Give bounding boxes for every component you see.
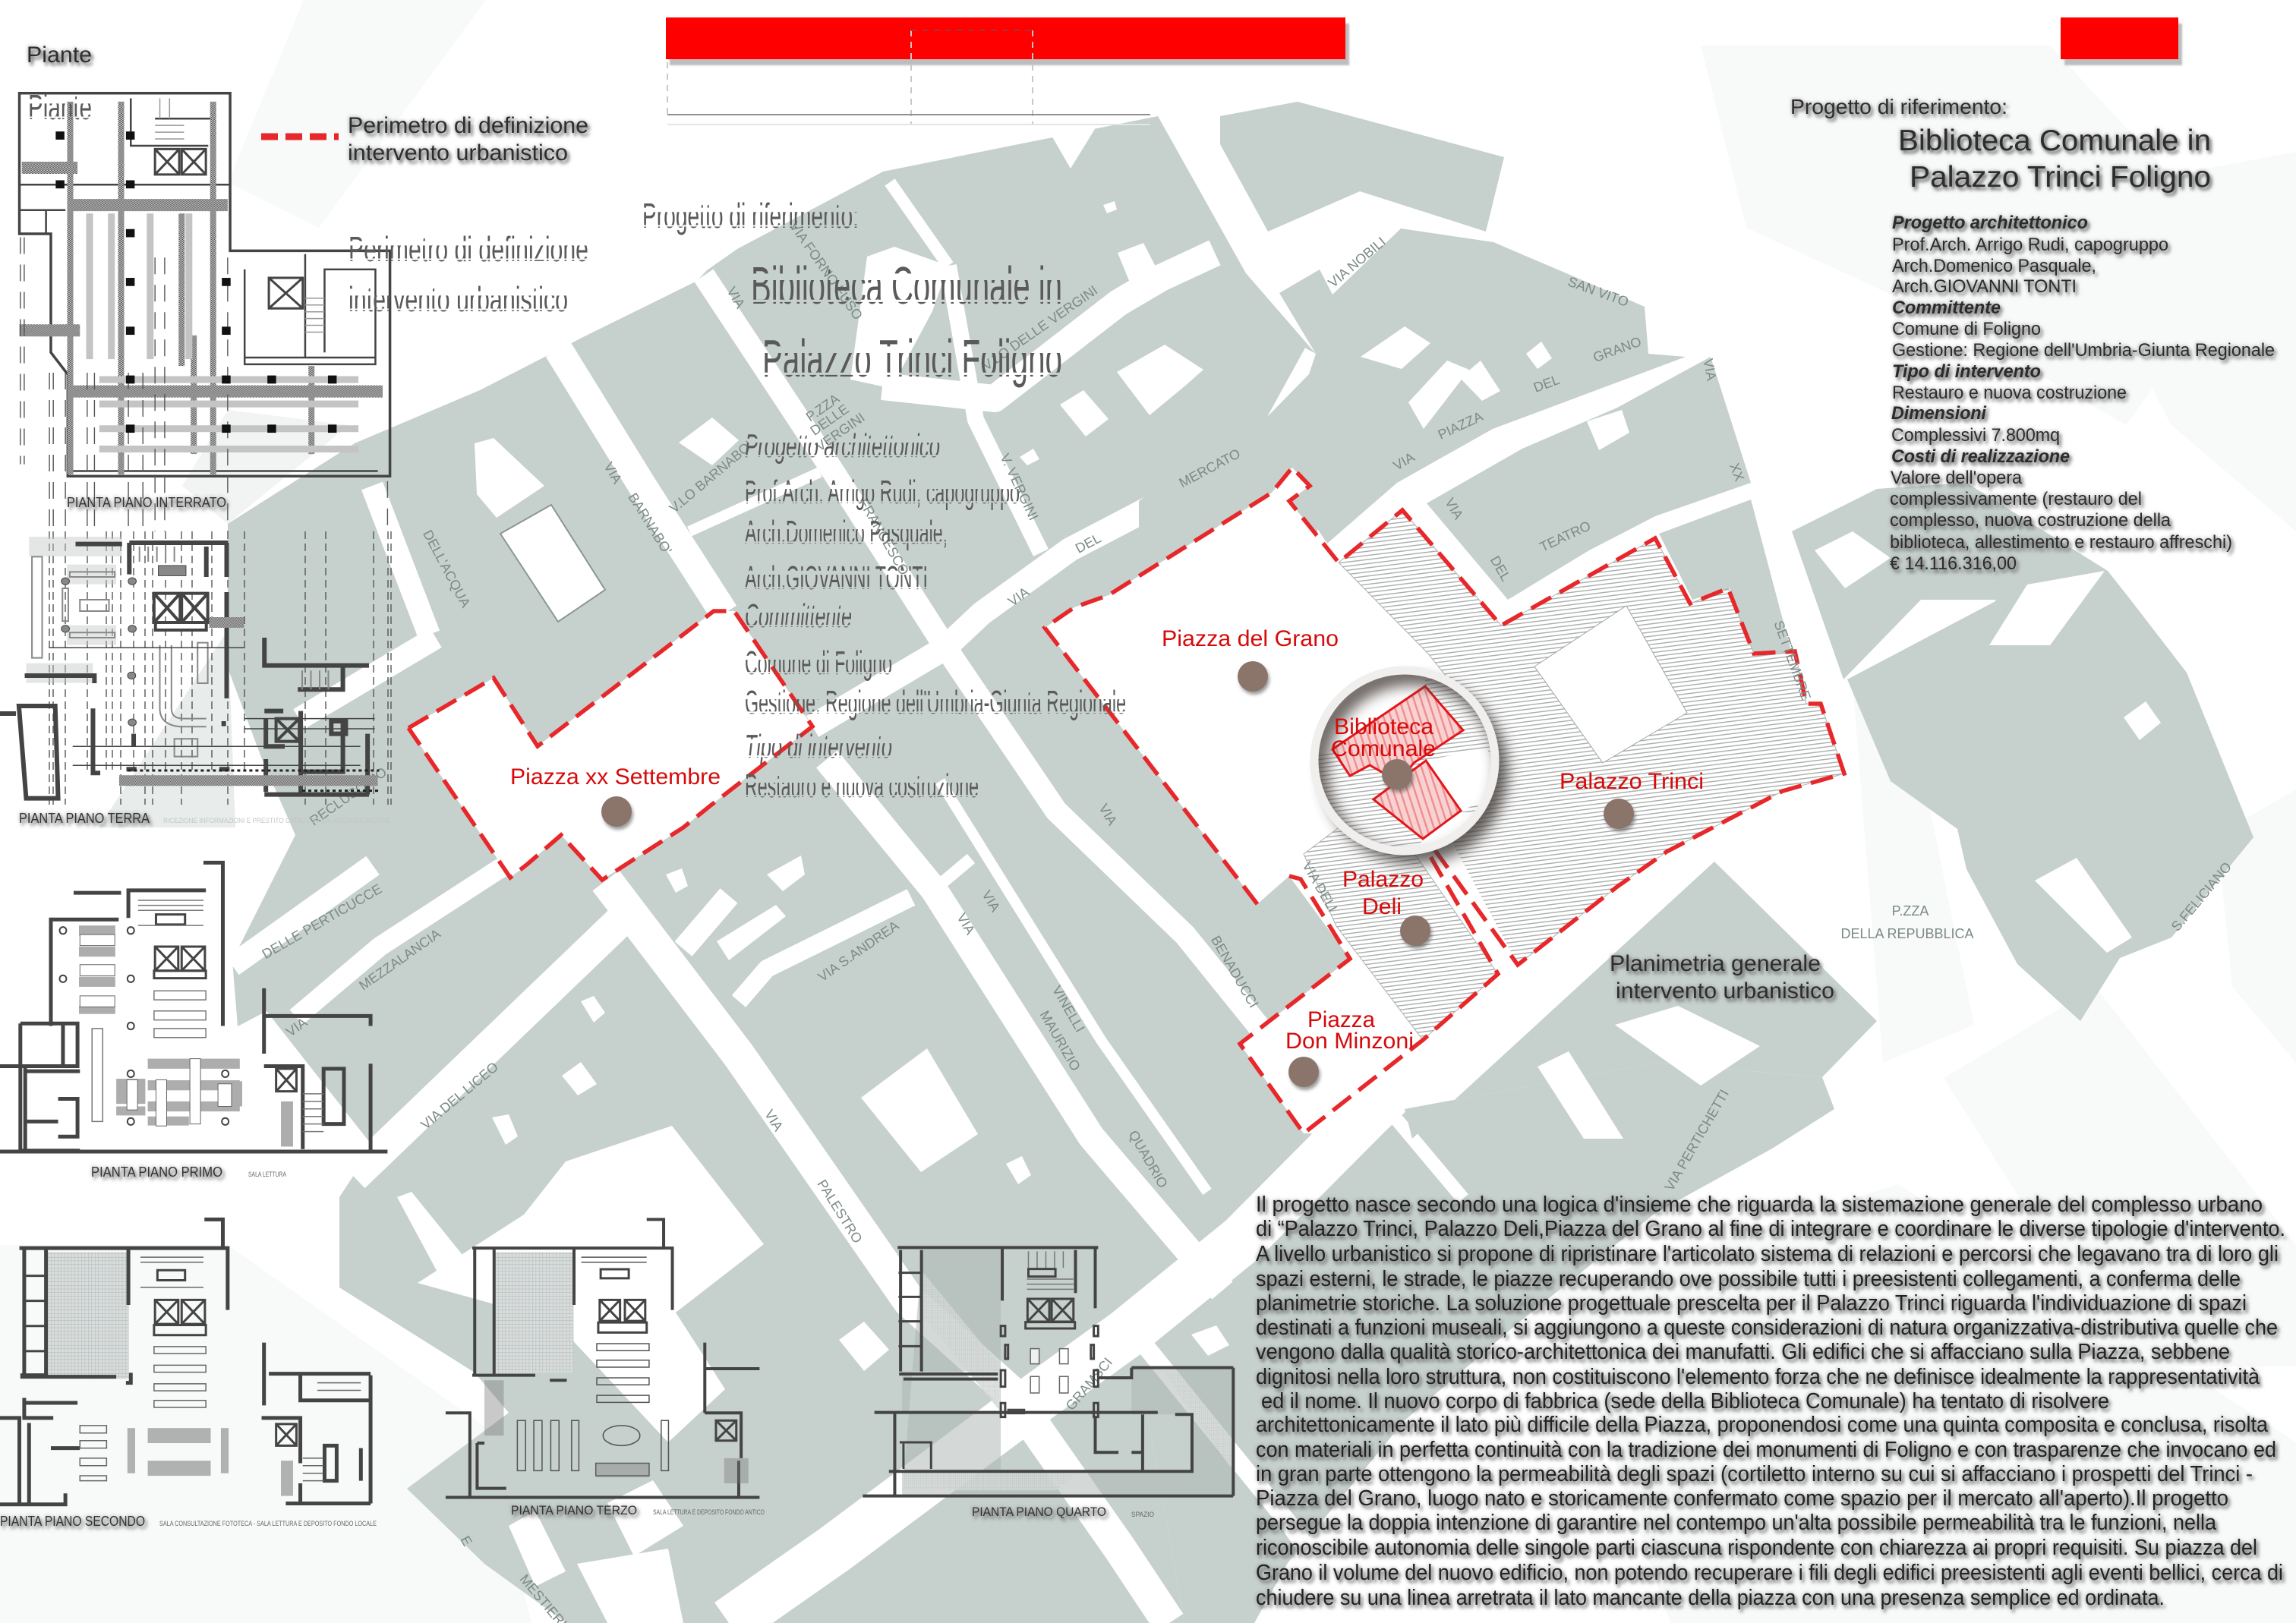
building courtyard outline [500,505,605,622]
ghost text: legend duplicate [350,235,588,311]
third floor drawing [446,1219,759,1498]
ground plan drawing [0,543,379,799]
ground label: PIANTA PIANO TERRA [19,811,150,826]
street name labels: VIA [979,887,1003,915]
map caption: Planimetria generale: intervento urbanistico [1616,979,1834,1004]
street name labels: VIA [724,284,748,311]
project data sheet: € 14.116.316,00 [1890,553,2017,574]
magnifier ring [1314,670,1495,851]
floor plan: second floor [0,1219,377,1529]
magnifier disc [1315,671,1494,850]
street name labels: MAURIZIO [1037,1008,1083,1073]
street name labels: DELLE [807,402,852,439]
map place labels in red: Deli [1362,894,1402,919]
street name labels: DEL [1531,372,1562,396]
ground sub-label: RICEZIONE INFORMAZIONI E PRESTITO CATALOGO SALA CONSULTAZIONE [163,817,391,824]
street name labels: P.ZZA [803,391,842,424]
second floor sub-label: SALA CONSULTAZIONE FOTOTECA - SALA LETTURA E DEPOSITO FONDO LOCALE [159,1520,377,1527]
first floor drawing [0,862,387,1152]
white lane between the palazzi [1397,789,1519,974]
street name labels: PIAZZA [1436,408,1485,443]
street name labels: MEZZALANCIA [356,926,443,993]
legend: perimeter text [348,113,588,165]
project heading: Palazzo Trinci Foligno [1910,161,2211,194]
location dots [601,661,1634,1087]
street name labels: VIA PERTICHETTI [1661,1087,1732,1193]
ghost text: project reference duplicate: Biblioteca Comunale in [751,256,1062,315]
map base: central blocks [228,116,1443,1623]
street name labels: DEL [1073,531,1103,556]
legend: perimeter line sample [261,134,339,140]
basement plan drawing [20,93,390,531]
map place labels in red: Comunale [1331,736,1436,761]
project data sheet: biblioteca, allestimento e restauro affreschi) [1890,532,2232,553]
first floor label: PIANTA PIANO PRIMO [91,1164,222,1180]
project description paragraph: ed il nome. Il nuovo corpo di fabbrica (sede della Biblioteca Comunale) ha tentato di risolvere [1261,1389,2109,1413]
first floor sub-label: SALA LETTURA [248,1171,286,1178]
project data sheet: Valore dell'opera [1891,468,2023,488]
street name labels: V. VERGINI [997,451,1041,522]
project data sheet: complessivamente (restauro del [1890,489,2142,509]
street name labels: VIA S.ANDREA [815,918,902,985]
hatched context [1318,679,1491,846]
fourth floor sub-label: SPAZIO [1131,1511,1154,1518]
Palazzo Deli hatched area [1304,824,1498,1040]
street name labels: SETTEMBRE [1771,619,1814,702]
map: streets [232,182,1463,1623]
street name labels: V.LO DELLE VERGINI [979,282,1100,373]
white court inside lens [1428,748,1491,809]
project data sheet: Tipo di intervento [1892,361,2041,382]
street name labels: FRANCESCO [856,496,912,578]
project data sheet: Restauro e nuova costruzione [1892,383,2127,403]
street name labels: VIA [954,910,978,938]
Piazza XX Settembre white square [408,611,812,880]
perimeter: Palazzo Deli and Piazza Don Minzoni [1240,789,1498,1133]
magnifier circle on Biblioteca Comunale [1283,668,1508,865]
fourth floor label: PIANTA PIANO QUARTO [972,1505,1106,1519]
street name labels: VIA [1442,495,1466,522]
legend: perimeter text: intervento urbanistico [348,140,568,165]
street name labels: BARNABO' [625,490,675,557]
street name labels: RECLUSORIO [307,764,390,828]
Palazzo Trinci hatched area [1339,510,1844,965]
project data sheet: Costi di realizzazione [1891,446,2070,467]
project data sheet: Complessivi 7.800mq [1891,425,2060,446]
project description paragraph: persegue la doppia intenzione di garantire nel contempo un'alta possibile permeabilità tra le funzioni, nella [1256,1511,2217,1535]
floor plan: fourth floor [863,1247,1233,1519]
project description paragraph [1256,1193,2285,1610]
second floor label: PIANTA PIANO SECONDO [0,1514,145,1529]
project description paragraph: chiudere su una linea arretrata il lato mancante della piazza con una presenza semplice ed ordinata. [1256,1586,2165,1610]
map place labels in red: Biblioteca [1334,714,1433,739]
second floor drawing [0,1219,371,1506]
project data sheet: Committente [1892,298,2001,318]
street name labels: XX [1727,461,1747,484]
street name labels: VIA [601,459,625,487]
ghost text: project reference duplicate: Prof.Arch. Arrigo Rudi, capogruppo [745,474,1020,511]
project data sheet: complesso, nuova costruzione della [1890,510,2171,531]
project data sheet [1890,213,2275,574]
ghost text: project reference duplicate [642,196,1126,805]
ghost vertical dashes between plans [49,531,391,805]
street name labels: BENADUCCI [1208,933,1261,1010]
street name labels: S.FELICIANO [2168,859,2234,934]
perimeter: Piazza del Grano and Palazzo Trinci [1045,468,1844,965]
red dashed perimeter lines [408,468,1844,1133]
street name labels: DELLE PERTICUCCE [260,881,384,962]
map place labels in red: Piazza del Grano [1162,626,1339,651]
street name labels: GRANO [1591,334,1643,365]
street name labels: DELLA REPUBBLICA [1840,926,1974,941]
basement label: PIANTA PIANO INTERRATO [67,495,226,510]
project data sheet: Gestione: Regione dell'Umbria-Giunta Regionale [1892,340,2275,361]
Palazzo Trinci courtyard [1534,606,1687,763]
map caption: Planimetria generale: Planimetria generale [1610,951,1821,976]
ghost text: project reference duplicate: Tipo di intervento [745,728,892,765]
project data sheet: Arch.GIOVANNI TONTI [1892,276,2077,297]
Piazza del Grano white square [1045,468,1443,904]
ghost text: project reference duplicate: Arch.Domenico Pasquale, [745,514,948,551]
red bar: title placeholder [666,17,1345,59]
project data sheet: Comune di Foligno [1892,319,2041,339]
third floor sub-label: SALA LETTURA E DEPOSITO FONDO ANTICO [653,1508,765,1516]
project data sheet: Arch.Domenico Pasquale, [1892,256,2096,276]
project data sheet: Prof.Arch. Arrigo Rudi, capogruppo [1892,235,2168,255]
project data sheet: Progetto architettonico [1892,213,2088,233]
perimeter: Piazza XX Settembre [408,611,812,880]
project description paragraph: Piazza del Grano, luogo nato e storicamente confermato come spazio per il mercato all'aperto).Il progetto [1256,1486,2228,1511]
inner shadow [1318,674,1491,847]
ghost frame under red bar [667,30,1150,124]
street name labels: VIA [1096,801,1120,828]
map place labels in red: Palazzo Trinci [1560,769,1704,794]
ghost text: project reference duplicate: Committente [745,597,852,635]
project description paragraph: in gran parte ottengono la permeabilità degli spazi (cortiletto interno su cui si affacciano i prospetti del Trinci - [1256,1462,2253,1486]
ghost text: project reference duplicate: Gestione: Regione dell'Umbria-Giunta Regionale [745,684,1126,721]
floor plan: third floor [446,1219,765,1517]
project description paragraph: spazi esterni, le strade, le piazze recuperando ove possibile tutti i preesistenti collegamenti, a conferma delle [1256,1267,2241,1291]
project description paragraph: vengono dalla qualità storico-architettonica dei manufatti. Gli edifici che si affacciano sulla Piazza, sebbene [1256,1340,2230,1364]
map caption: Planimetria generale [1610,951,1834,1004]
ghost text: project reference duplicate: Comune di Foligno [745,644,892,682]
ghost text: project reference duplicate: Restauro e nuova costruzione [745,767,979,805]
ghost text: legend duplicate: Perimetro di definizione [348,229,588,269]
street name labels: SAN VITO [1566,274,1631,310]
map place labels in red [510,626,1704,1054]
ghost text: project reference duplicate: Palazzo Trinci Foligno [762,329,1062,388]
street name labels [260,219,2234,1623]
fourth floor drawing [863,1247,1233,1496]
map place labels in red: Piazza xx Settembre [510,764,721,789]
project data sheet: Dimensioni [1891,403,1987,424]
street name labels: TEATRO [1538,518,1593,555]
street name labels: DELL'ACQUA [420,528,474,610]
floor plan: basement [20,93,390,531]
map place labels in red: Palazzo [1342,867,1424,892]
street name labels: QUADRIO [1126,1128,1171,1190]
legend: perimeter text: Perimetro di definizione [348,113,588,138]
project heading: Biblioteca Comunale in [1898,124,2211,157]
project description paragraph: Il progetto nasce secondo una logica d'insieme che riguarda la sistemazione generale del complesso urbano [1256,1193,2263,1217]
street name labels: VINELLI [1049,983,1088,1035]
ghost text: Piante duplicate: Piante [28,87,92,127]
floor plan: first floor [0,862,387,1180]
street name labels: VIA FORNO FUSO [787,219,866,323]
street name labels: DEL [1487,553,1514,584]
street name labels: VIA [1390,449,1418,474]
ghost text: legend duplicate: intervento urbanistico [348,279,568,319]
map place labels in red: Don Minzoni [1285,1029,1414,1054]
floor plan: ground floor [0,531,391,826]
ghost text: project reference duplicate: Progetto architettonico [745,427,940,465]
street name labels: VIA NOBILI [1325,234,1389,291]
map: blocks north-east [1139,102,2253,1139]
street name labels: MERCATO [1176,446,1243,490]
street name labels: GRAMSCI [1063,1355,1115,1413]
street name labels: VIA [1005,585,1032,610]
red bar: corner tag [2061,17,2178,59]
street name labels: VIA [283,1015,310,1040]
street name labels: PALESTRO [815,1177,866,1246]
heading: Piante: Piante [27,43,92,68]
project heading [1790,95,2211,194]
ghost text: project reference duplicate: Arch.GIOVANNI TONTI [745,559,928,597]
map: southern wedge under the text [1139,1063,1834,1623]
third floor label: PIANTA PIANO TERZO [511,1503,637,1517]
street name labels: P.ZZA [1892,903,1929,919]
street name labels: VIA [762,1107,786,1133]
map: NE white gaps [1361,326,2161,1139]
project description paragraph: planimetrie storiche. La soluzione progettuale prescelta per il Palazzo Trinci riguarda l'individuazione di spazi [1256,1291,2247,1316]
main road [729,859,1714,1623]
project heading: Progetto di riferimento: [1790,95,2007,118]
ghost text: project reference duplicate: Progetto di riferimento: [642,196,859,235]
magnifier outer shadow [1323,679,1508,864]
street name labels: VERGINI [813,410,868,455]
street name labels: VIA DELI [1299,859,1340,915]
library building, red hatched [1332,686,1463,839]
Piazza Don Minzoni white square [1240,959,1423,1133]
map place labels in red: Piazza [1307,1007,1375,1032]
street name labels: VIA DEL LICEO [418,1059,501,1133]
street name labels: E [458,1533,475,1549]
street name labels: VIA [1701,358,1719,382]
map: white courtyards [397,129,1229,1623]
street name labels: V.LO BARNABO' [667,438,755,516]
